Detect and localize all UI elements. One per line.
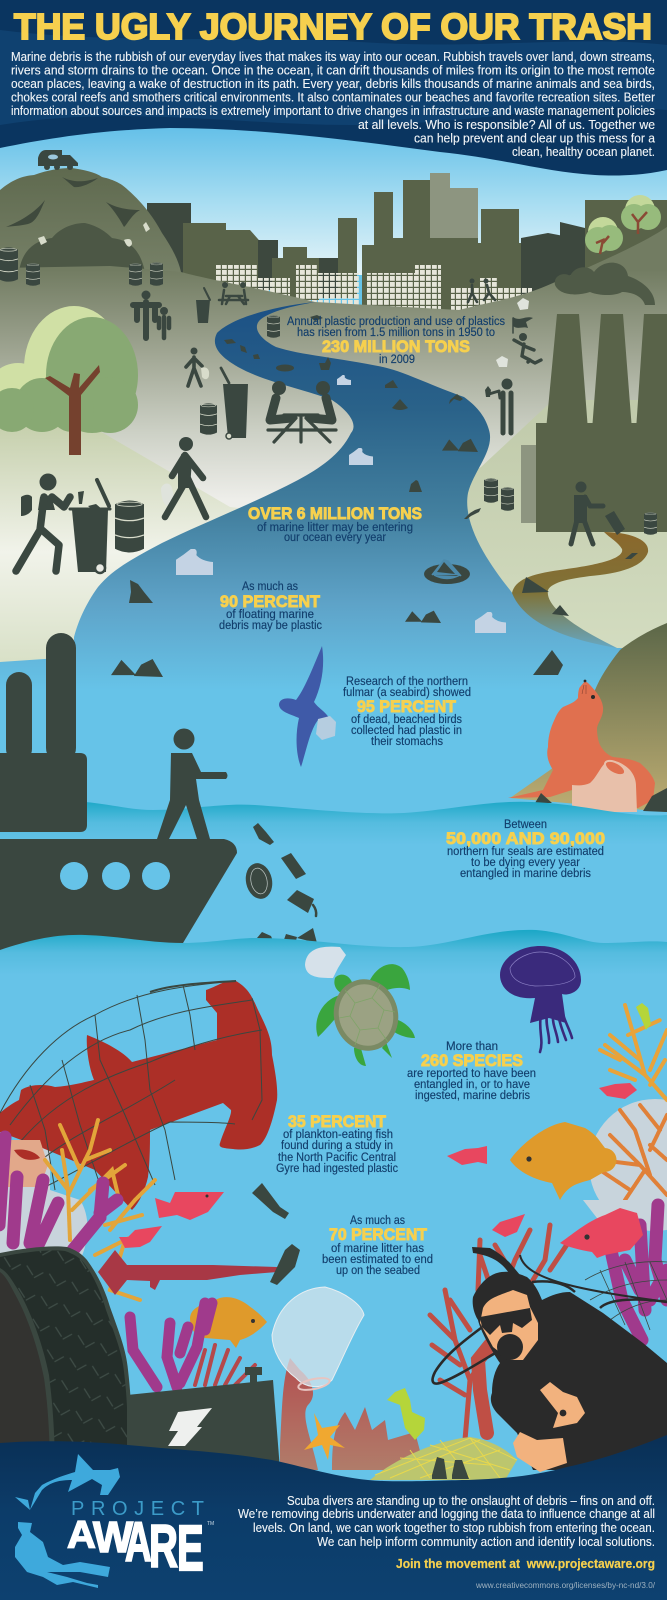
barrel on river bank <box>267 315 280 338</box>
diver mask <box>480 1308 532 1335</box>
plastic bag in river <box>349 448 373 465</box>
car battery <box>127 1367 280 1470</box>
right reef <box>589 1003 667 1231</box>
yellow coral <box>45 1120 155 1300</box>
text: over 6 million tons: of marine litter may be entering <box>257 520 413 534</box>
barrel next to bin <box>200 403 217 435</box>
text: over 6 million tons: our ocean every year <box>284 530 386 544</box>
footer text <box>238 1493 655 1549</box>
wave: lower <box>0 930 667 1600</box>
logo: aware: A <box>67 1514 96 1557</box>
river debris <box>224 315 481 519</box>
orange-red coral <box>600 1105 667 1200</box>
small wheelie bin <box>196 288 210 323</box>
wave: upper <box>0 800 667 1000</box>
person throwing trash into bin <box>16 474 103 571</box>
rocks of debris <box>405 611 441 623</box>
tire <box>0 1246 132 1460</box>
text: 90 percent: 90 PERCENT <box>220 592 321 611</box>
pink fish mid <box>447 1146 487 1165</box>
text: 70 percent <box>322 1213 433 1277</box>
green land right <box>440 400 667 670</box>
starfish <box>304 1413 345 1460</box>
text: 70 percent: of marine litter has <box>331 1241 424 1255</box>
pictogram group of people <box>133 290 169 338</box>
small walker <box>186 348 209 386</box>
intro text: clean, healthy ocean planet. <box>512 144 655 159</box>
text: 260 species: More than <box>446 1039 498 1053</box>
text: annual plastic production: has risen from 1.5 million tons in 1950 to <box>297 325 495 339</box>
diver hands <box>540 1382 585 1428</box>
logo: project: PROJECT <box>71 1498 204 1520</box>
hammerhead shark <box>0 980 277 1210</box>
diver face <box>480 1290 538 1360</box>
runner with flag <box>513 317 541 363</box>
pale rock behind fish <box>583 1200 650 1225</box>
icon: garbage truck <box>38 150 78 170</box>
text: 95 percent: 95 PERCENT <box>357 697 457 716</box>
debris left <box>111 659 163 677</box>
bottle near sawfish <box>270 1244 300 1285</box>
trash falling from ship <box>243 823 317 948</box>
landfill mound <box>0 168 181 290</box>
scuba diver <box>433 1247 667 1472</box>
barrel next to person <box>115 501 144 552</box>
orange fish left <box>190 1297 267 1348</box>
text: 50,000 and 90,000: northern fur seals are estimated <box>447 844 604 858</box>
translucent plastic bag <box>272 1287 364 1387</box>
text: over 6 million tons <box>248 504 422 544</box>
text: 260 species: ingested, marine debris <box>415 1088 530 1102</box>
text: annual plastic production: 230 MILLION TONS <box>322 337 470 356</box>
text: 95 percent <box>343 674 471 748</box>
wheelie bin with open lid <box>70 480 110 573</box>
city windows <box>215 265 532 312</box>
logo: aware: W <box>93 1513 133 1562</box>
icon: small seahorse <box>636 1003 651 1030</box>
factory <box>521 314 667 532</box>
purple coral <box>130 1303 212 1387</box>
orange coral <box>600 1005 667 1100</box>
yellow net with trash <box>370 1437 517 1480</box>
plastic jug <box>572 761 637 812</box>
text: annual plastic production <box>287 314 505 366</box>
text: 35 percent <box>276 1112 398 1175</box>
seal <box>508 680 667 812</box>
small people on the hill <box>468 278 495 302</box>
text: 95 percent: their stomachs <box>371 734 443 748</box>
factory worker dumping waste <box>571 482 657 544</box>
litter on mound <box>38 222 150 247</box>
sawfish <box>98 1250 282 1295</box>
purple coral <box>0 1137 117 1250</box>
seabird with plastic <box>279 646 336 767</box>
debris right <box>533 650 563 675</box>
coral: left reef <box>0 1120 155 1300</box>
fishing net <box>0 981 262 1200</box>
footer panel <box>0 1435 667 1600</box>
licence url: www.creativecommons.org/licenses/by-nc-nd/3.0/ <box>475 1580 656 1590</box>
plastic bag <box>176 549 213 575</box>
call to action: Join the movement at www.projectaware.org <box>396 1557 655 1571</box>
intro text: at all levels. Who is responsible? All of us. Together we <box>358 117 655 132</box>
small picnic table <box>219 282 248 304</box>
right hill trees <box>585 195 661 254</box>
pink fish top right <box>560 1208 643 1258</box>
text: 260 species: 260 SPECIES <box>421 1051 523 1070</box>
logo: aware: A <box>125 1511 152 1574</box>
purple coral right <box>612 1205 667 1340</box>
text: 95 percent: Research of the northern <box>346 674 468 688</box>
debris in stream <box>522 553 638 616</box>
text: 70 percent: up on the seabed <box>336 1263 420 1277</box>
icon: gulls <box>6 177 140 227</box>
intro text <box>11 49 656 159</box>
text: 35 percent: the North Pacific Central <box>278 1150 396 1164</box>
city skyline <box>147 173 667 312</box>
orange fish right <box>510 1122 617 1200</box>
logo: aware: E <box>177 1514 204 1584</box>
text: 90 percent: of floating marine <box>226 607 314 621</box>
text: 90 percent: debris may be plastic <box>219 618 322 632</box>
pale sponge under shark <box>3 1140 48 1187</box>
text: 70 percent: As much as <box>350 1213 405 1227</box>
text: 95 percent: collected had plastic in <box>351 723 462 737</box>
text: 50,000 and 90,000: to be dying every year <box>471 855 580 869</box>
icon: diver logo <box>15 1522 110 1588</box>
red branching coral left of diver <box>430 1225 570 1440</box>
net behind diver <box>585 1262 667 1330</box>
green hill left <box>0 420 340 700</box>
barrels on river bank <box>484 478 514 511</box>
text: 50,000 and 90,000 <box>446 817 605 880</box>
intro text: can help prevent and clear up this mess for a <box>414 130 656 146</box>
small pink fish upper <box>492 1214 525 1237</box>
plastic bag right <box>475 612 506 633</box>
small pink fish <box>119 1226 162 1248</box>
rock with seal <box>510 623 667 812</box>
logo: aware: TM <box>207 1521 214 1527</box>
logo: aware <box>67 1511 214 1584</box>
text: 260 species: entangled in, or to have <box>414 1077 530 1091</box>
text: 35 percent: 35 PERCENT <box>288 1112 387 1131</box>
red fan coral <box>195 1345 255 1385</box>
land <box>0 227 667 700</box>
jellyfish <box>500 946 581 1052</box>
text: 50,000 and 90,000: entangled in marine debris <box>460 866 591 880</box>
text: annual plastic production: Annual plastic production and use of plastics <box>287 314 505 328</box>
person holding cup <box>485 378 512 433</box>
bottle in water <box>252 1183 289 1219</box>
spiky red coral <box>332 1407 425 1470</box>
picnic table with people <box>268 381 336 442</box>
tire in water <box>424 560 470 584</box>
text: annual plastic production: in 2009 <box>379 352 415 366</box>
polluted stream <box>512 532 648 648</box>
small pink fish right <box>599 1083 637 1099</box>
river <box>0 302 667 820</box>
logo: aware: R <box>149 1513 178 1580</box>
walker with bag <box>161 437 206 517</box>
text: over 6 million tons: OVER 6 MILLION TONS <box>248 504 422 523</box>
seahorse <box>387 1388 425 1440</box>
text: 260 species: are reported to have been <box>407 1066 536 1080</box>
text: 90 percent: As much as <box>242 579 298 593</box>
background: sky <box>0 125 667 275</box>
text: 35 percent: found during a study in <box>281 1138 393 1152</box>
turtle <box>305 947 415 1066</box>
text: 70 percent: 70 PERCENT <box>329 1225 428 1244</box>
black bag <box>129 580 153 603</box>
text: 70 percent: been estimated to end <box>322 1252 433 1266</box>
pink fish <box>155 1192 224 1220</box>
barrels on the landfill <box>0 247 163 286</box>
factory smoke <box>555 263 655 305</box>
text: 35 percent: Gyre had ingested plastic <box>276 1161 398 1175</box>
icon: hammerhead logo <box>15 1454 120 1510</box>
left tree <box>0 306 138 455</box>
coral backdrop: left pale rock <box>0 1141 88 1260</box>
header panel <box>0 0 667 175</box>
text: 95 percent: fulmar (a seabird) showed <box>343 685 471 699</box>
text: 260 species <box>407 1039 536 1102</box>
text: 50,000 and 90,000: 50,000 AND 90,000 <box>446 829 605 848</box>
text: 90 percent <box>219 579 322 632</box>
red coral below bag <box>280 1358 318 1470</box>
white litter bags on land <box>496 298 529 367</box>
text: 35 percent: of plankton-eating fish <box>283 1127 393 1141</box>
text: 50,000 and 90,000: Between <box>504 817 547 831</box>
text: 95 percent: of dead, beached birds <box>351 712 462 726</box>
ship with person <box>0 633 237 952</box>
wheelie bin <box>221 368 248 439</box>
title: THE UGLY JOURNEY OF OUR TRASH <box>14 6 652 47</box>
